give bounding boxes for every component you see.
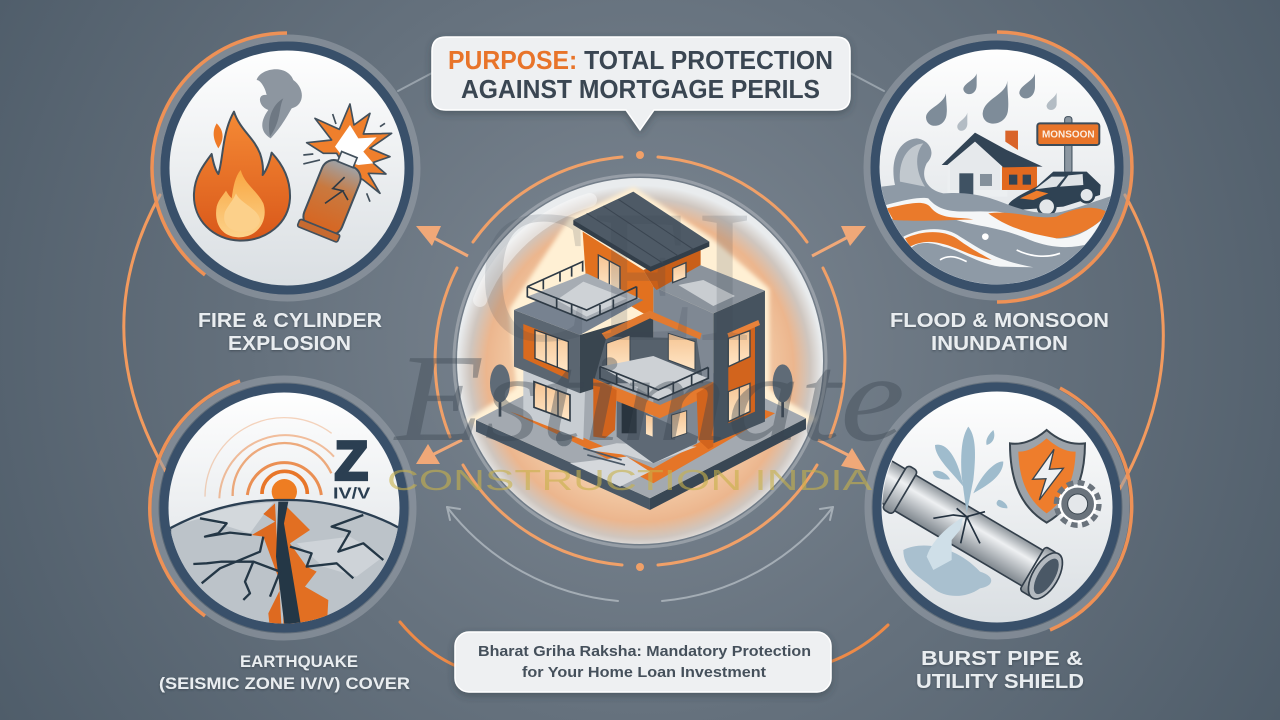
heading: PURPOSE: TOTAL PROTECTION xyxy=(448,45,833,75)
label: earthquake: EARTHQUAKE xyxy=(240,652,358,671)
watermark: CEI xyxy=(478,172,753,382)
label: fire: EXPLOSION xyxy=(228,333,351,355)
sign: monsoon: MONSOON xyxy=(1042,129,1095,140)
label: burst pipe xyxy=(916,648,1084,693)
seismic zone badge: IV/V xyxy=(333,485,371,502)
arrow: to fire xyxy=(416,226,468,256)
bottom callout xyxy=(455,632,831,692)
icon: seismic waves and crack xyxy=(170,418,400,630)
label: fire xyxy=(198,310,383,355)
arrow: to burst pipe xyxy=(818,440,866,471)
panel: burst pipe and utility shield xyxy=(842,378,1132,636)
panel: fire and cylinder explosion xyxy=(152,33,417,298)
arrow: to earthquake xyxy=(416,440,462,464)
heading second line: AGAINST MORTGAGE PERILS xyxy=(461,74,820,104)
icon: flood scene xyxy=(880,73,1120,297)
label: earthquake xyxy=(159,652,410,693)
center bay xyxy=(593,311,713,463)
icon: burst pipe and shield xyxy=(882,426,1102,600)
arrow: to flood xyxy=(812,226,866,256)
label: burst pipe: UTILITY SHIELD xyxy=(916,671,1084,693)
right tower xyxy=(653,265,765,443)
label: fire: FIRE & CYLINDER xyxy=(198,310,383,332)
sign: monsoon xyxy=(1037,123,1099,145)
connector lines between perils xyxy=(124,73,1163,666)
label: burst pipe: BURST PIPE & xyxy=(921,648,1083,670)
central protection rings xyxy=(435,151,845,601)
panel: flood and monsoon xyxy=(867,32,1132,302)
label: earthquake: (SEISMIC ZONE IV/V) COVER xyxy=(159,674,410,693)
arrows from home to perils xyxy=(416,226,866,471)
seismic zone badge: Z xyxy=(335,429,368,491)
watermark: CONSTRUCTION INDIA xyxy=(387,465,873,497)
bottom callout: Bharat Griha Raksha: Mandatory Protection xyxy=(478,643,811,660)
label: flood: FLOOD & MONSOON xyxy=(890,310,1109,332)
illustration: house xyxy=(476,192,806,510)
label: flood: INUNDATION xyxy=(931,333,1068,355)
title callout xyxy=(432,37,850,130)
central protective sphere xyxy=(454,175,826,547)
platform xyxy=(476,370,806,510)
left wing xyxy=(514,262,653,440)
icon: flame and cylinder xyxy=(194,69,392,242)
trees xyxy=(490,364,793,417)
label: flood xyxy=(890,310,1109,355)
top block xyxy=(573,192,709,313)
watermark: Estimate xyxy=(393,330,905,468)
panel: earthquake xyxy=(150,379,413,637)
watermark xyxy=(387,172,905,497)
bottom callout: for Your Home Loan Investment xyxy=(522,664,766,681)
